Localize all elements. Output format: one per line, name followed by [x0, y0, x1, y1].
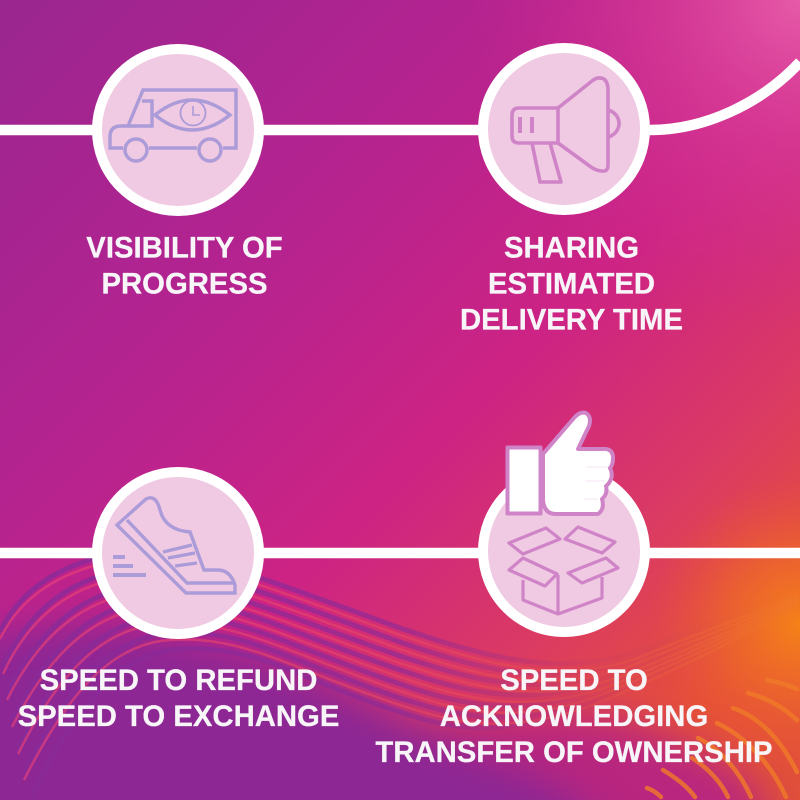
icon: delivery truck with eye and clock — [110, 90, 236, 161]
circle badge 1 — [97, 49, 259, 211]
label: sharing estimated delivery time: ESTIMATED — [488, 268, 655, 300]
label: speed to acknowledging transfer of ownership: SPEED TO — [500, 664, 648, 697]
label: speed to acknowledging transfer of ownership: ACKNOWLEDGING — [440, 700, 708, 733]
step 2: sharing estimated delivery time — [460, 48, 683, 336]
circle badge 3 — [97, 472, 259, 634]
label: visibility of progress: VISIBILITY OF — [86, 232, 283, 264]
step 1: visibility of progress — [86, 49, 283, 300]
step 3: speed to refund and exchange — [18, 472, 339, 733]
step 4: speed to acknowledging transfer of ownership — [375, 413, 773, 769]
label: sharing estimated delivery time: SHARING — [504, 232, 639, 264]
icon: running shoe — [113, 498, 235, 593]
label: speed to acknowledging transfer of ownership: TRANSFER OF OWNERSHIP — [375, 736, 773, 769]
orange arcs bottom right — [647, 680, 797, 797]
background wave lines — [0, 553, 798, 796]
circle badge 4 — [483, 470, 645, 632]
icon: thumbs up — [508, 413, 613, 514]
label: sharing estimated delivery time: DELIVERY TIME — [460, 304, 683, 336]
label: visibility of progress: PROGRESS — [101, 268, 268, 300]
connector lines — [0, 62, 800, 553]
icon: open box — [509, 527, 618, 614]
label: speed to refund, speed to exchange: SPEED TO REFUND — [40, 664, 317, 697]
label: speed to refund, speed to exchange: SPEED TO EXCHANGE — [18, 700, 339, 733]
circle badge 2 — [483, 48, 645, 210]
icon: megaphone — [512, 78, 619, 182]
